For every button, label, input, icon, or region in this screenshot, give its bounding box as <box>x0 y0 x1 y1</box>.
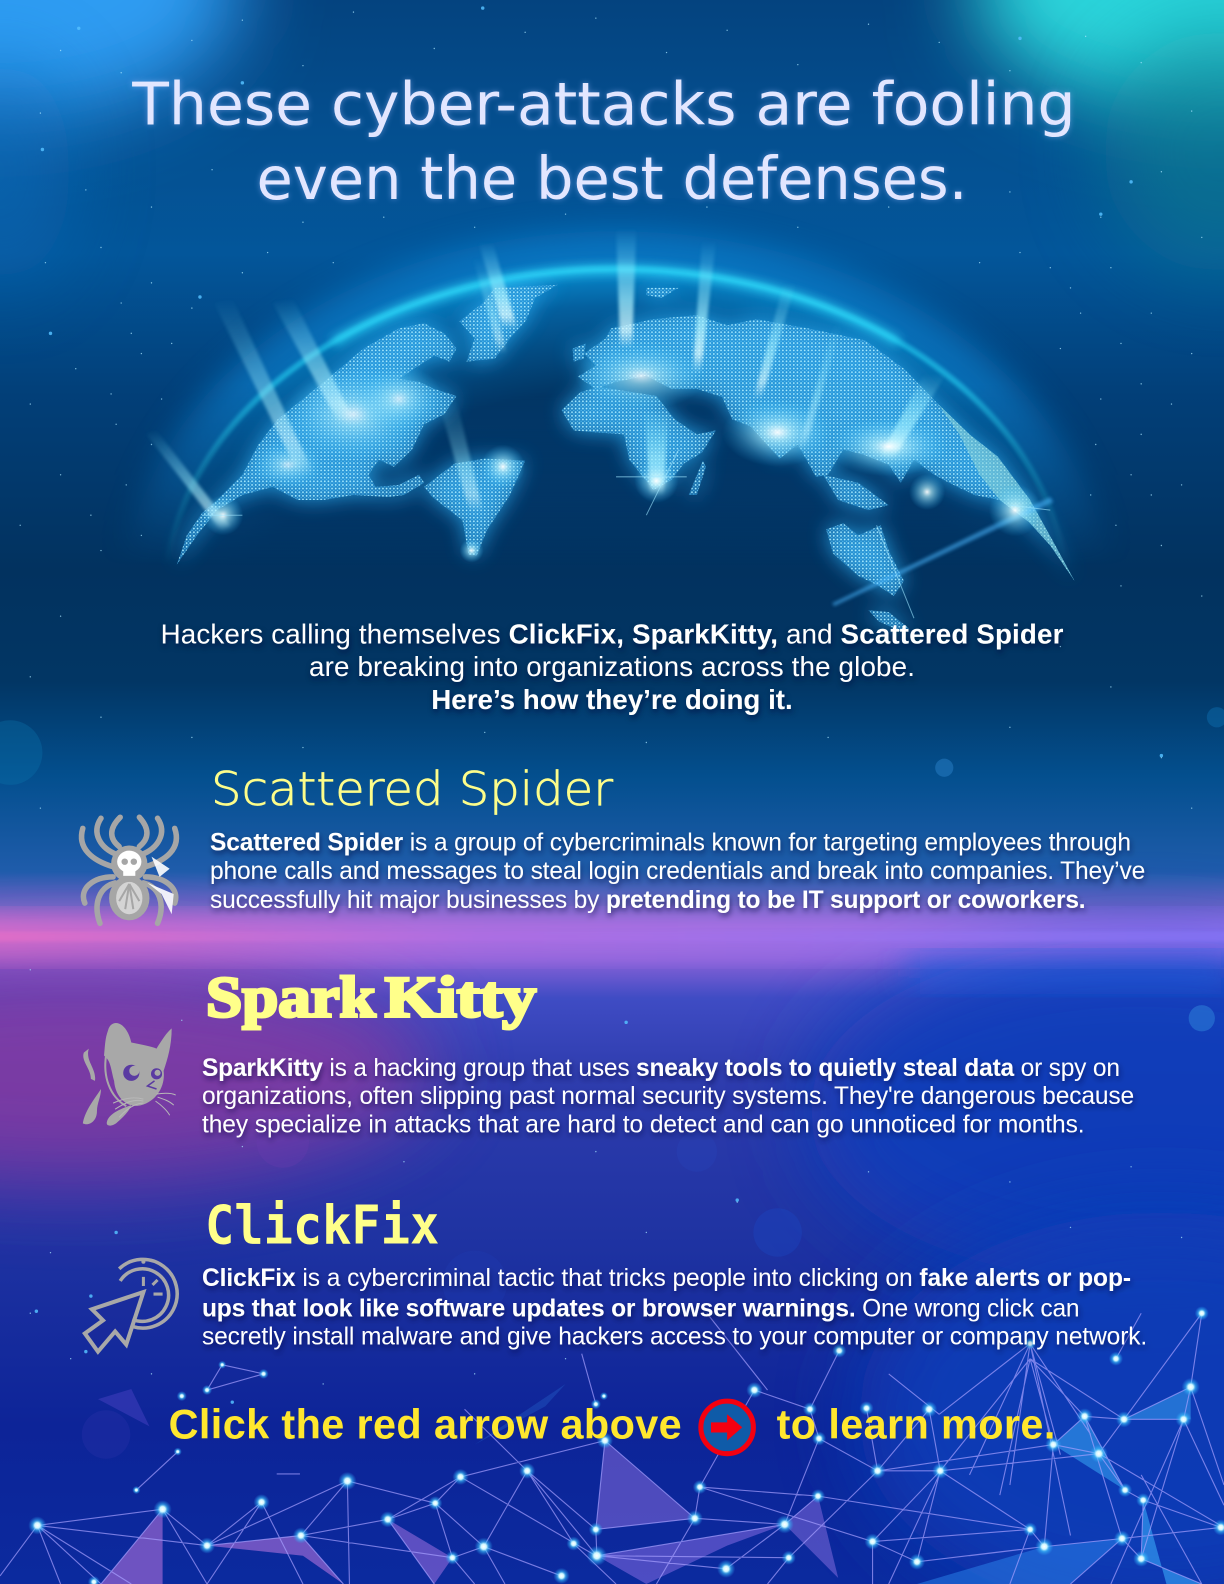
mesh lines <box>0 1313 1224 1584</box>
description: ClickFix is a cybercriminal tactic that tricks people into clicking on fake alerts or pop- <box>202 1265 1131 1292</box>
description: SparkKitty is a hacking group that uses sneaky tools to quietly steal data or spy on <box>202 1055 1120 1082</box>
description <box>202 1265 1147 1351</box>
light rays <box>146 228 1053 606</box>
icon: cursor click <box>85 1259 177 1352</box>
heading: ClickFix: ClickFix <box>205 1194 439 1257</box>
cta text left: Click the red arrow above <box>169 1402 682 1448</box>
heading: SparkKitty: Spark <box>206 964 376 1029</box>
intro text: Here’s how they’re doing it. <box>431 684 793 715</box>
icon: red arrow button <box>701 1401 753 1454</box>
mesh triangles <box>98 1384 1202 1584</box>
title: These cyber-attacks are fooling <box>131 70 1076 138</box>
world map continents <box>177 285 1075 631</box>
globe <box>146 228 1075 933</box>
city hot spots <box>202 341 1050 618</box>
intro text: Hackers calling themselves ClickFix, SparkKitty, and Scattered Spider <box>161 618 1064 650</box>
description: organizations, often slipping past normal security systems. They're dangerous because <box>202 1083 1134 1110</box>
title <box>131 70 1076 213</box>
cta text right: to learn more. <box>777 1402 1055 1448</box>
section: ClickFix <box>85 1194 1147 1352</box>
section: Scattered Spider <box>82 762 1145 923</box>
description: phone calls and messages to steal login credentials and break into companies. They’ve <box>210 858 1145 885</box>
section: SparkKitty <box>83 964 1134 1138</box>
bright arc at the top of the atmosphere <box>333 269 899 342</box>
intro text <box>161 618 1064 715</box>
description: successfully hit major businesses by pretending to be IT support or coworkers. <box>210 887 1086 914</box>
intro text: are breaking into organizations across the globe. <box>309 651 915 682</box>
heading: SparkKitty: Kitty <box>385 964 536 1029</box>
description: secretly install malware and give hackers access to your computer or company network. <box>202 1324 1147 1351</box>
description: ups that look like software updates or browser warnings. One wrong click can <box>202 1295 1080 1322</box>
call to action <box>169 1401 1055 1454</box>
description: they specialize in attacks that are hard to detect and can go unnoticed for months. <box>202 1111 1085 1138</box>
atmosphere glow <box>136 220 1096 550</box>
title: even the best defenses. <box>257 145 967 213</box>
description <box>210 830 1145 914</box>
icon: cat <box>83 1023 176 1126</box>
mesh nodes <box>28 1306 1224 1584</box>
heading: Scattered Spider: Scattered Spider <box>211 762 614 816</box>
description: Scattered Spider is a group of cybercriminals known for targeting employees through <box>210 830 1131 857</box>
description <box>202 1055 1134 1138</box>
icon: spider <box>82 817 176 923</box>
heading: SparkKitty <box>206 964 536 1029</box>
network mesh <box>0 1306 1224 1584</box>
